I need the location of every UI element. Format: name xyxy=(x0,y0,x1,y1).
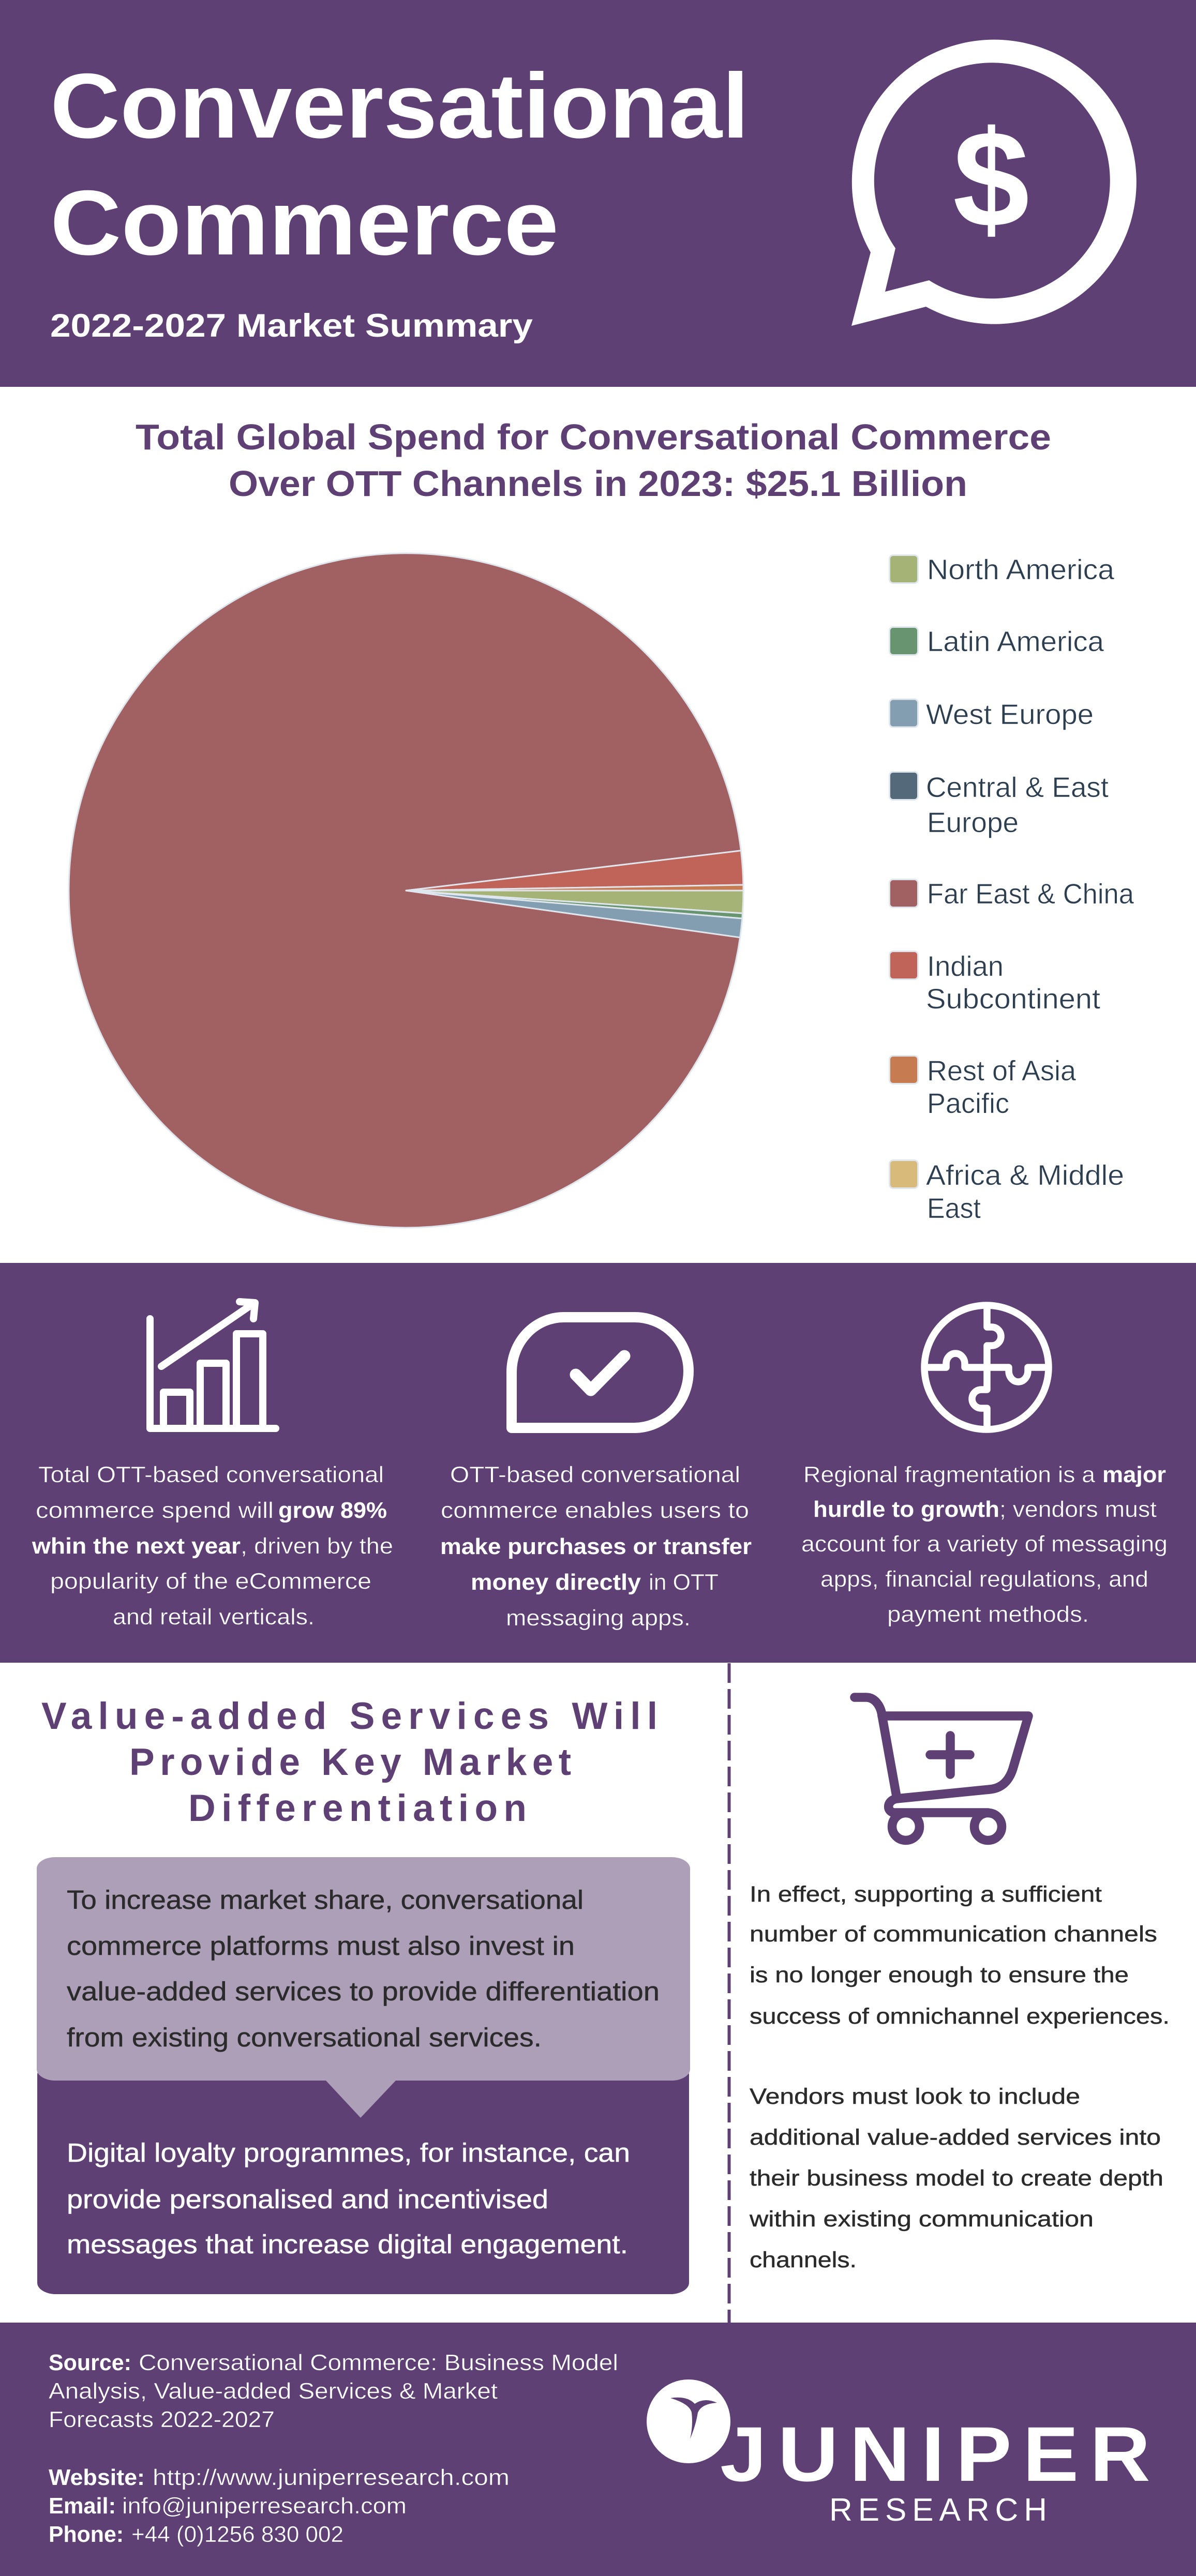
legend: West Europe xyxy=(926,698,1094,730)
panel: dark purple callout xyxy=(37,2063,689,2294)
text: regional fragmentation: account for a variety of messaging xyxy=(801,1531,1168,1557)
text: direct purchases: commerce enables users to xyxy=(441,1498,749,1523)
chart heading: Total Global Spend for Conversational Commerce xyxy=(136,417,1051,457)
legend: Far East & China xyxy=(927,878,1134,910)
source text xyxy=(49,2350,618,2432)
legend: Central & East xyxy=(926,771,1109,803)
contact details: Website: xyxy=(49,2465,145,2490)
icon: growth bar chart xyxy=(150,1302,276,1428)
text: regional fragmentation: apps, financial regulations, and xyxy=(820,1566,1148,1592)
logo: Juniper Research xyxy=(647,2379,1161,2528)
text: spend growth: popularity of the eCommerce xyxy=(50,1569,371,1594)
text: regional fragmentation: hurdle to growth xyxy=(813,1497,999,1522)
text: spend growth xyxy=(32,1462,393,1630)
text: direct purchases: OTT-based conversational xyxy=(450,1462,740,1487)
section heading: value-added services: Value-added Services Will xyxy=(41,1695,657,1737)
legend: Latin America xyxy=(927,625,1104,657)
text: spend growth: grow 89% xyxy=(278,1498,387,1523)
dashed divider xyxy=(727,1663,730,2323)
text: vendors paragraph: Vendors must look to include xyxy=(750,2084,1080,2109)
text: regional fragmentation xyxy=(801,1462,1168,1627)
title: Commerce xyxy=(50,171,559,274)
legend: Rest of Asia xyxy=(927,1054,1076,1087)
icon: puzzle circle xyxy=(924,1305,1050,1429)
contact details: info@juniperresearch.com xyxy=(122,2493,407,2519)
contact details: Email: xyxy=(49,2493,116,2519)
text: spend growth: commerce spend will xyxy=(36,1498,274,1523)
callout text: digital loyalty: provide personalised and incentivised xyxy=(67,2185,548,2214)
contact details: +44 (0)1256 830 002 xyxy=(131,2522,343,2547)
source text: Forecasts 2022-2027 xyxy=(49,2407,275,2432)
panel: footer xyxy=(0,2323,1196,2576)
text: regional fragmentation: major xyxy=(1102,1462,1166,1487)
icon: message with check mark xyxy=(512,1317,689,1428)
text: omnichannel paragraph: is no longer enough to ensure the xyxy=(750,1963,1129,1987)
section heading: value-added services xyxy=(41,1695,657,1829)
text: regional fragmentation: ; vendors must xyxy=(999,1497,1157,1522)
text: direct purchases: messaging apps. xyxy=(506,1605,691,1631)
icon: speech bubble with dollar xyxy=(851,40,1137,326)
text: spend growth: , driven by the xyxy=(241,1533,393,1559)
text: direct purchases: in OTT xyxy=(649,1570,719,1595)
contact details: Phone: xyxy=(49,2522,124,2547)
subtitle: 2022-2027 Market Summary xyxy=(50,308,533,344)
callout text: market share: To increase market share, conversational xyxy=(67,1885,584,1915)
legend: Europe xyxy=(927,806,1019,838)
section heading: value-added services: Differentiation xyxy=(188,1787,527,1829)
text: regional fragmentation: payment methods. xyxy=(887,1602,1089,1627)
title: Conversational xyxy=(50,54,749,157)
text: direct purchases xyxy=(440,1462,752,1631)
text: regional fragmentation: Regional fragmentation is a xyxy=(803,1462,1096,1487)
callout text: digital loyalty: Digital loyalty programmes, for instance, can xyxy=(67,2138,630,2167)
contact details xyxy=(49,2465,510,2547)
pie chart xyxy=(69,553,743,1228)
text: vendors paragraph: additional value-added services into xyxy=(750,2125,1161,2150)
text: direct purchases: make purchases or transfer xyxy=(440,1534,752,1559)
callout text: market share xyxy=(67,1885,660,2052)
legend: Indian xyxy=(927,950,1004,982)
logo: Juniper Research: RESEARCH xyxy=(829,2492,1047,2528)
legend: North America xyxy=(927,553,1114,585)
chart heading xyxy=(136,417,1051,504)
text: omnichannel paragraph xyxy=(750,1882,1170,2029)
title xyxy=(50,54,749,274)
text: direct purchases: money directly xyxy=(471,1570,641,1595)
icon: shopping cart with plus xyxy=(855,1697,1028,1840)
text: omnichannel paragraph: success of omnichannel experiences. xyxy=(750,2004,1170,2029)
legend: East xyxy=(927,1192,981,1224)
legend: Pacific xyxy=(927,1087,1009,1119)
panel: light purple speech callout xyxy=(37,1857,690,2118)
chart heading: Over OTT Channels in 2023: $25.1 Billion xyxy=(229,463,967,504)
source text: Conversational Commerce: Business Model xyxy=(139,2350,618,2375)
source text: Analysis, Value-added Services & Market xyxy=(49,2378,498,2404)
logo: Juniper Research: JUNIPER xyxy=(720,2411,1161,2498)
panel: header xyxy=(0,0,1196,387)
legend: Africa & Middle xyxy=(926,1159,1124,1191)
text: vendors paragraph: within existing communication xyxy=(749,2207,1094,2232)
text: spend growth: Total OTT-based conversational xyxy=(38,1462,384,1487)
callout text: market share: from existing conversational services. xyxy=(67,2023,542,2052)
callout text: digital loyalty xyxy=(67,2138,630,2259)
contact details: http://www.juniperresearch.com xyxy=(153,2465,510,2490)
panel: key facts band xyxy=(0,1263,1196,1663)
text: vendors paragraph: channels. xyxy=(750,2248,857,2272)
section heading: value-added services: Provide Key Market xyxy=(129,1741,571,1783)
callout text: market share: value-added services to provide differentiation xyxy=(67,1977,660,2006)
text: vendors paragraph: their business model to create depth xyxy=(750,2166,1163,2191)
text: omnichannel paragraph: In effect, supporting a sufficient xyxy=(750,1882,1102,1907)
text: spend growth: and retail verticals. xyxy=(113,1604,315,1630)
text: vendors paragraph xyxy=(749,2084,1163,2272)
text: spend growth: whin the next year xyxy=(32,1533,241,1559)
source text: Source: xyxy=(49,2350,131,2375)
callout text: digital loyalty: messages that increase digital engagement. xyxy=(67,2229,628,2259)
legend xyxy=(890,553,1134,1224)
icon: speech bubble with dollar: $ xyxy=(953,102,1029,256)
legend: Subcontinent xyxy=(926,983,1100,1015)
text: omnichannel paragraph: number of communication channels xyxy=(750,1922,1157,1947)
callout text: market share: commerce platforms must also invest in xyxy=(67,1931,575,1961)
